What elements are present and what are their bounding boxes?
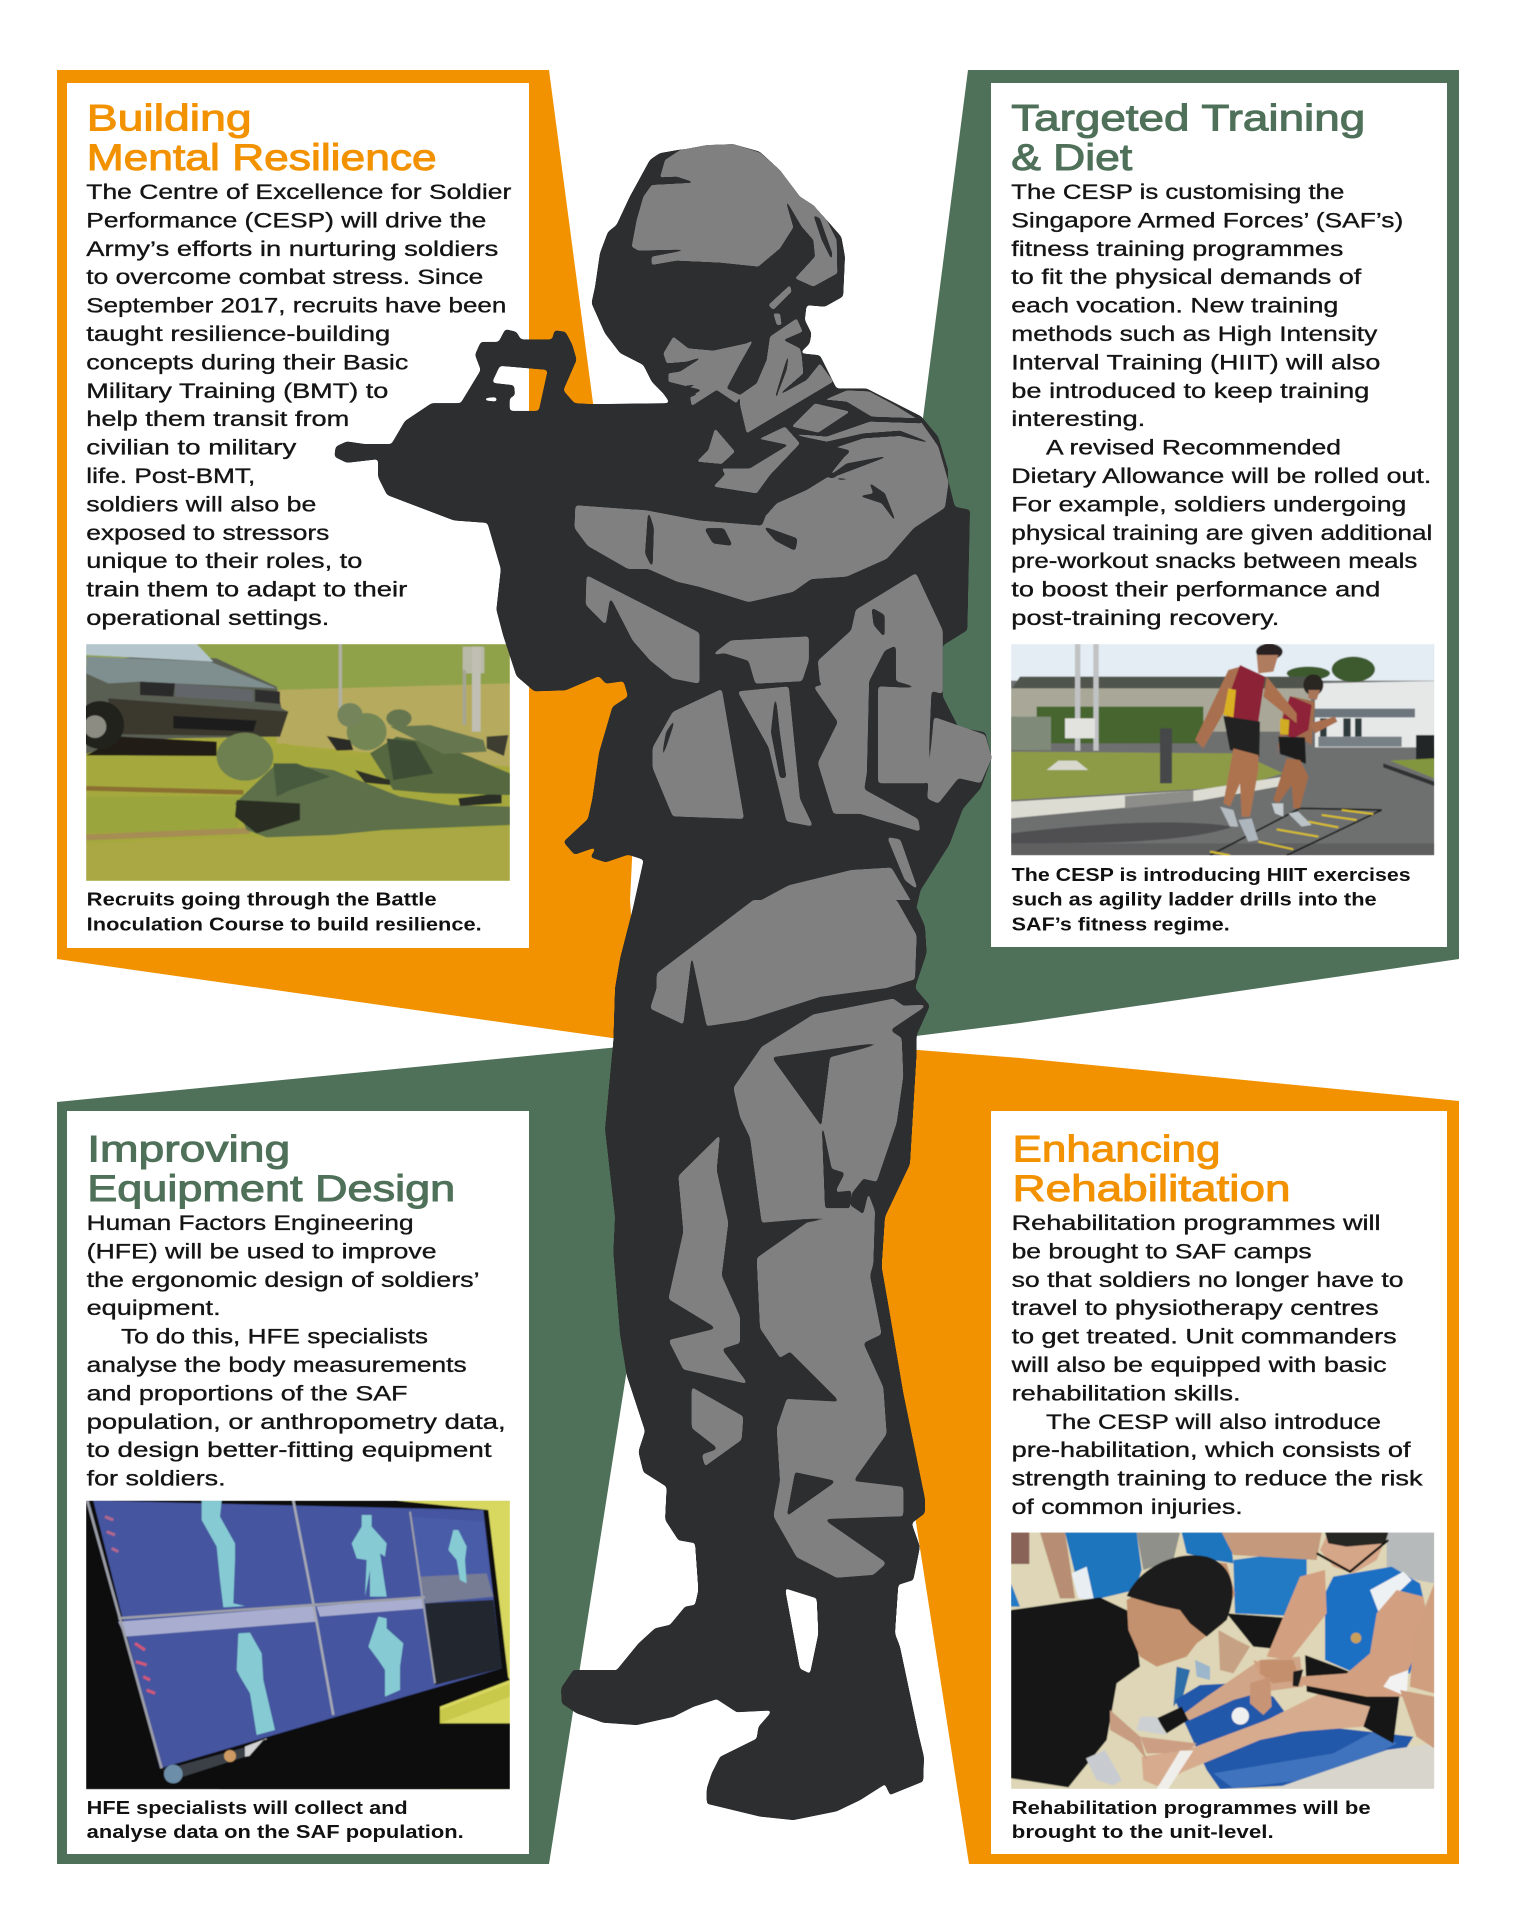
body text: targeted training and diet: Interval Training (HIIT) will also [1011,349,1380,374]
body text: targeted training and diet: to fit the physical demands of [1011,264,1363,289]
heading: improving equipment design: Improving [87,1128,290,1170]
body text: building mental resilience: exposed to stressors [86,520,330,545]
body text: targeted training and diet: each vocation. New training [1011,293,1338,318]
body text: targeted training and diet: Singapore Armed Forces’ (SAF’s) [1011,207,1403,232]
body text: building mental resilience: taught resilience-building [86,321,390,346]
heading: enhancing rehabilitation: Enhancing [1012,1128,1221,1170]
body text: targeted training and diet: to boost their performance and [1011,577,1380,602]
photo: monitor showing body scans [86,1501,510,1789]
caption: HIIT exercises: The CESP is introducing HIIT exercises [1012,864,1411,885]
body text: improving equipment design: to design better-fitting equipment [87,1437,492,1462]
body text: enhancing rehabilitation: travel to physiotherapy centres [1012,1295,1379,1320]
body text: improving equipment design: for soldiers. [87,1466,226,1491]
body text: building mental resilience: soldiers will also be [86,491,316,516]
body text: enhancing rehabilitation: so that soldiers no longer have to [1012,1267,1404,1292]
body text: targeted training and diet: interesting. [1011,406,1145,431]
body text: targeted training and diet: fitness training programmes [1011,236,1344,261]
body text: targeted training and diet: physical training are given additional [1011,520,1432,545]
caption: HIIT exercises [1012,864,1411,934]
body text: improving equipment design: equipment. [87,1295,221,1320]
body text: improving equipment design: population, or anthropometry data, [87,1409,506,1434]
body text: enhancing rehabilitation: The CESP will also introduce [1046,1409,1381,1434]
body text: targeted training and diet: post-training recovery. [1011,605,1279,630]
body text: building mental resilience: Performance (CESP) will drive the [86,207,486,232]
body text: targeted training and diet: Dietary Allowance will be rolled out. [1011,463,1431,488]
body text: enhancing rehabilitation: be brought to SAF camps [1012,1238,1312,1263]
body text: targeted training and diet: pre-workout snacks between meals [1011,548,1418,573]
body text: building mental resilience: unique to their roles, to [86,548,362,573]
panel: enhancing rehabilitation [870,1047,1459,1864]
body text: improving equipment design: analyse the body measurements [87,1352,467,1377]
body text: improving equipment design: Human Factors Engineering [87,1210,414,1235]
caption: recruits: Inoculation Course to build resilience. [87,913,482,934]
body text: improving equipment design: the ergonomic design of soldiers’ [87,1267,480,1292]
body text: enhancing rehabilitation: of common injuries. [1012,1494,1243,1519]
soldier: legs and boots [561,900,930,1820]
body text: enhancing rehabilitation: rehabilitation skills. [1012,1380,1241,1405]
panel: targeted training and diet [880,70,1459,1038]
caption: HFE specialists: HFE specialists will collect and [87,1797,408,1818]
body text: building mental resilience: civilian to military [86,435,297,460]
panel: improving equipment design [57,1045,640,1864]
body text: targeted training and diet [1011,179,1432,630]
caption: HIIT exercises: SAF’s fitness regime. [1012,913,1230,934]
body text: building mental resilience: to overcome combat stress. Since [86,264,483,289]
body text: building mental resilience: Army’s efforts in nurturing soldiers [86,236,499,261]
body text: improving equipment design: To do this, HFE specialists [121,1324,428,1349]
body text: enhancing rehabilitation: strength training to reduce the risk [1012,1466,1423,1491]
soldier silhouette with rifle [334,144,992,1820]
body text: building mental resilience: operational settings. [86,605,329,630]
body text: targeted training and diet: methods such as High Intensity [1011,321,1378,346]
caption: rehabilitation unit-level [1012,1797,1371,1842]
body text: improving equipment design: (HFE) will be used to improve [87,1238,437,1263]
photo: agility ladder drill [1011,644,1434,855]
caption: recruits: Recruits going through the Battle [87,889,437,910]
body text: targeted training and diet: The CESP is customising the [1011,179,1344,204]
heading: building mental resilience: Building [87,97,252,139]
panel: building mental resilience [57,70,640,1042]
body text: enhancing rehabilitation: Rehabilitation programmes will [1012,1210,1381,1235]
caption: rehabilitation unit-level: brought to the unit-level. [1012,1821,1274,1842]
body text: enhancing rehabilitation: to get treated. Unit commanders [1012,1324,1397,1349]
photo: recruits crawling on grass [76,644,510,881]
body text: targeted training and diet: A revised Recommended [1046,435,1341,460]
heading: building mental resilience: Mental Resilience [87,136,437,178]
photo: physiotherapist treating a soldier [1011,1532,1434,1789]
body text: building mental resilience: The Centre of Excellence for Soldier [86,179,511,204]
body text: improving equipment design [87,1210,506,1491]
body text: building mental resilience [86,179,511,630]
soldier: upper body [334,144,992,920]
body text: enhancing rehabilitation: pre-habilitation, which consists of [1012,1437,1412,1462]
body text: enhancing rehabilitation: will also be equipped with basic [1010,1352,1387,1377]
caption: HIIT exercises: such as agility ladder drills into the [1012,889,1377,910]
body text: enhancing rehabilitation [1010,1210,1423,1519]
body text: building mental resilience: September 2017, recruits have been [86,293,506,318]
body text: building mental resilience: concepts during their Basic [86,349,409,374]
heading: enhancing rehabilitation: Rehabilitation [1012,1167,1291,1209]
heading: improving equipment design: Equipment Design [87,1167,455,1209]
body text: improving equipment design: and proportions of the SAF [87,1380,408,1405]
body text: building mental resilience: train them to adapt to their [86,577,407,602]
soldier: head, helmet and shoulder [632,144,937,523]
body text: building mental resilience: Military Training (BMT) to [86,378,388,403]
heading: improving equipment design [87,1128,455,1209]
caption: recruits [87,889,482,934]
heading: enhancing rehabilitation [1012,1128,1290,1209]
heading: building mental resilience [87,97,437,178]
body text: targeted training and diet: For example, soldiers undergoing [1011,491,1406,516]
heading: targeted training and diet [1011,97,1365,178]
caption: HFE specialists [87,1797,464,1842]
body text: building mental resilience: life. Post-BMT, [86,463,255,488]
caption: rehabilitation unit-level: Rehabilitation programmes will be [1012,1797,1371,1818]
heading: targeted training and diet: Targeted Training [1011,97,1365,139]
body text: targeted training and diet: be introduced to keep training [1011,378,1369,403]
caption: HFE specialists: analyse data on the SAF population. [87,1821,464,1842]
heading: targeted training and diet: & Diet [1011,136,1133,178]
body text: building mental resilience: help them transit from [86,406,349,431]
